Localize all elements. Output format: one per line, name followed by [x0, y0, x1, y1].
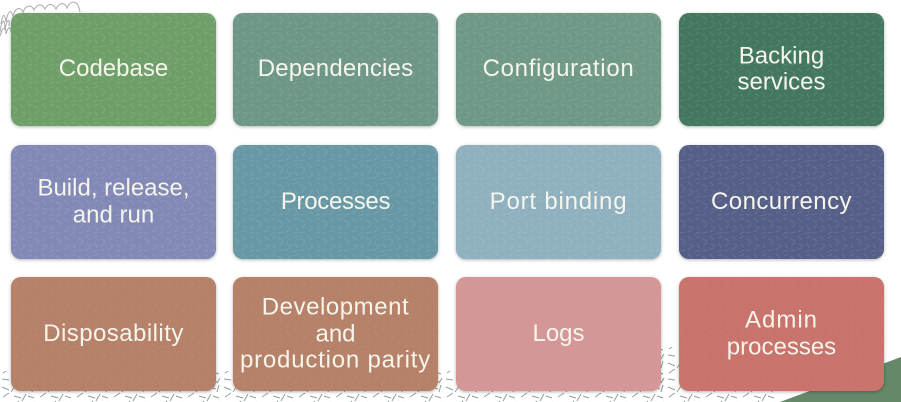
card: Concurrency: Concurrency — [711, 188, 852, 215]
card: Admin processes: Admin — [745, 306, 818, 334]
card: Admin processes: processes — [727, 333, 836, 360]
card: Concurrency — [679, 145, 884, 259]
card: Configuration — [456, 13, 661, 126]
card: Backing services — [679, 13, 884, 126]
card: Build, release, and run: Build, release, — [37, 174, 190, 202]
card: Dependencies — [233, 13, 438, 126]
card: Port binding — [456, 145, 661, 259]
card: Admin processes — [679, 277, 884, 391]
card: Logs — [456, 277, 661, 391]
card: Disposability: Disposability — [43, 320, 184, 347]
card: Processes — [233, 145, 438, 259]
card: Backing services: Backing — [739, 42, 824, 69]
card: Build, release, and run — [11, 145, 216, 259]
card: Disposability — [11, 277, 216, 391]
card: Development and production parity: production parity — [240, 346, 431, 373]
card: Codebase — [11, 13, 216, 126]
card: Codebase: Codebase — [59, 54, 168, 81]
card: Configuration: Configuration — [483, 54, 634, 81]
card: Build, release, and run: and run — [73, 201, 154, 228]
card: Development and production parity: Development — [262, 293, 409, 320]
card: Port binding: Port binding — [490, 188, 627, 215]
card: Dependencies: Dependencies — [258, 54, 413, 81]
card: Backing services: services — [737, 68, 826, 96]
card: Logs: Logs — [532, 320, 585, 347]
card: Development and production parity: and — [315, 320, 356, 347]
card: Processes: Processes — [281, 188, 390, 215]
card: Development and production parity — [233, 277, 438, 391]
